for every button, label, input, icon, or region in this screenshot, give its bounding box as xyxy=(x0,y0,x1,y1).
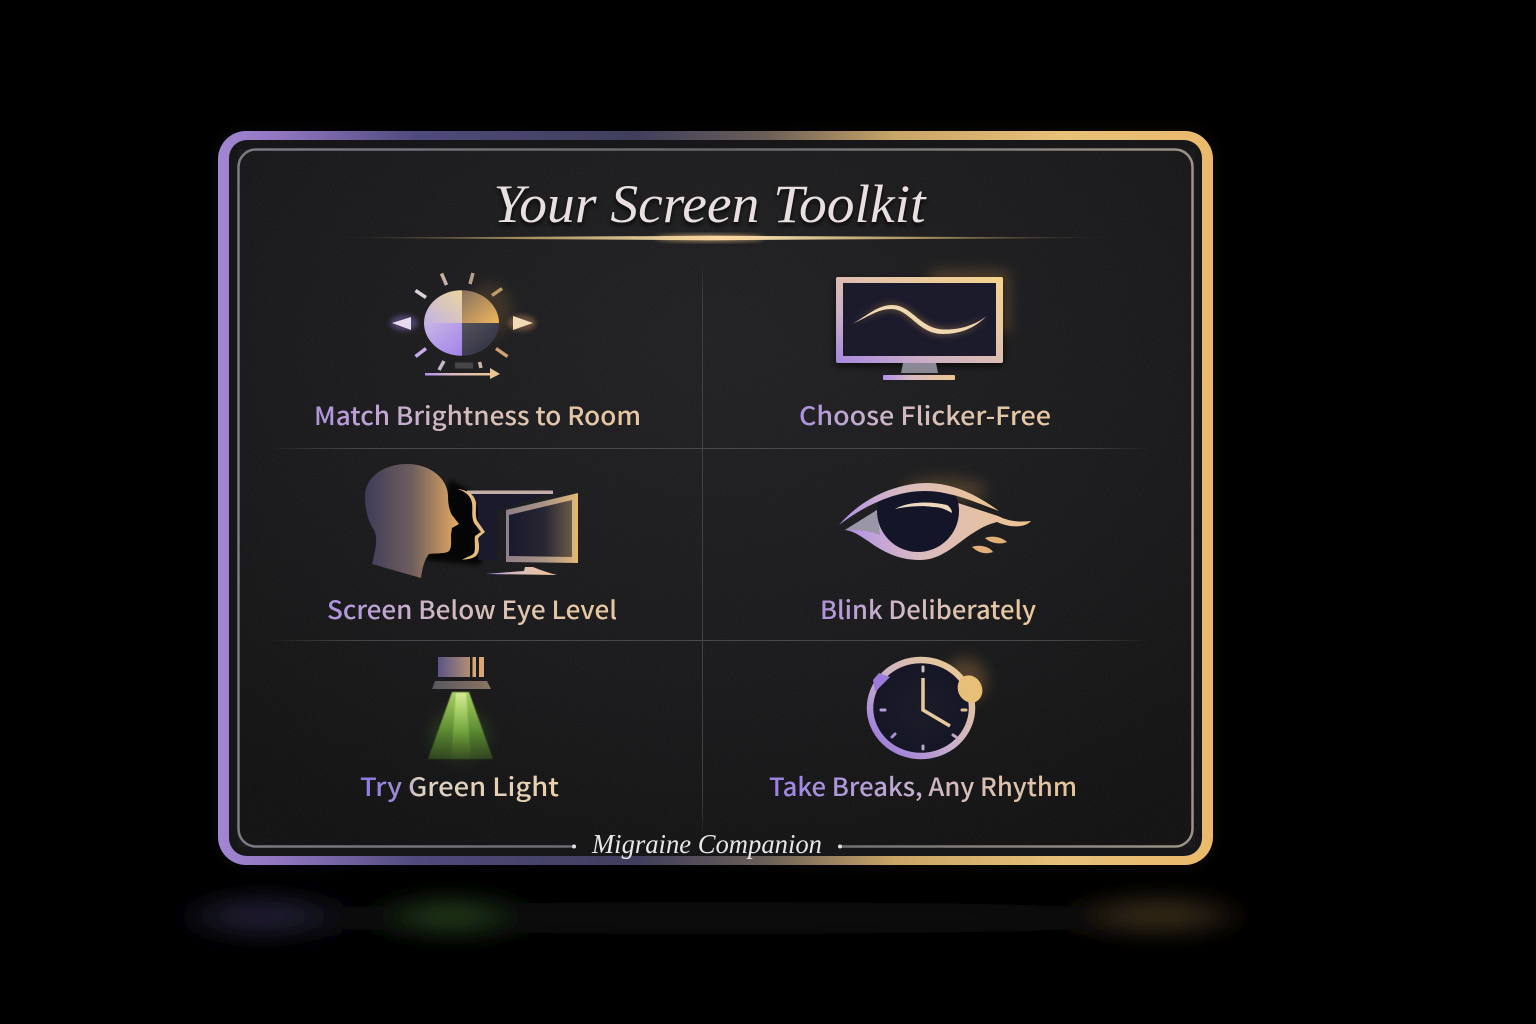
grid dividers xyxy=(270,265,1150,835)
head shadow xyxy=(425,480,490,565)
head silhouette xyxy=(365,464,459,578)
icon: green light lamp xyxy=(428,657,493,761)
front monitor xyxy=(506,493,578,563)
icon: flicker-free monitor xyxy=(836,272,1008,380)
label: choose flicker-free: Choose Flicker-Free xyxy=(799,397,1051,433)
panel: toolkit card xyxy=(218,131,1213,865)
gold profile outline xyxy=(457,489,485,560)
outer gradient frame xyxy=(218,131,1213,865)
inner line frame xyxy=(238,150,1192,846)
title: Your Screen Toolkit xyxy=(494,174,928,234)
icon: eye xyxy=(839,470,1031,560)
panel surface xyxy=(238,149,1195,847)
panel texture xyxy=(238,149,1195,847)
footer caption: Migraine Companion xyxy=(591,829,822,859)
title rule xyxy=(325,234,1125,242)
floor reflection xyxy=(175,898,1255,934)
label: match brightness: Match Brightness to Room xyxy=(314,397,641,433)
label: screen below eye level: Screen Below Eye Level xyxy=(327,591,617,627)
icon: clock xyxy=(870,658,987,756)
frame glow xyxy=(219,132,1212,864)
card base xyxy=(222,135,1209,861)
rear monitor xyxy=(468,493,553,560)
label: blink deliberately: Blink Deliberately xyxy=(820,591,1036,627)
label: take breaks: Take Breaks, Any Rhythm xyxy=(769,768,1077,804)
label: try green light: Try Green Light xyxy=(360,768,559,804)
icon: brightness sun xyxy=(390,273,536,379)
icon: head and lowered screen xyxy=(365,464,578,578)
